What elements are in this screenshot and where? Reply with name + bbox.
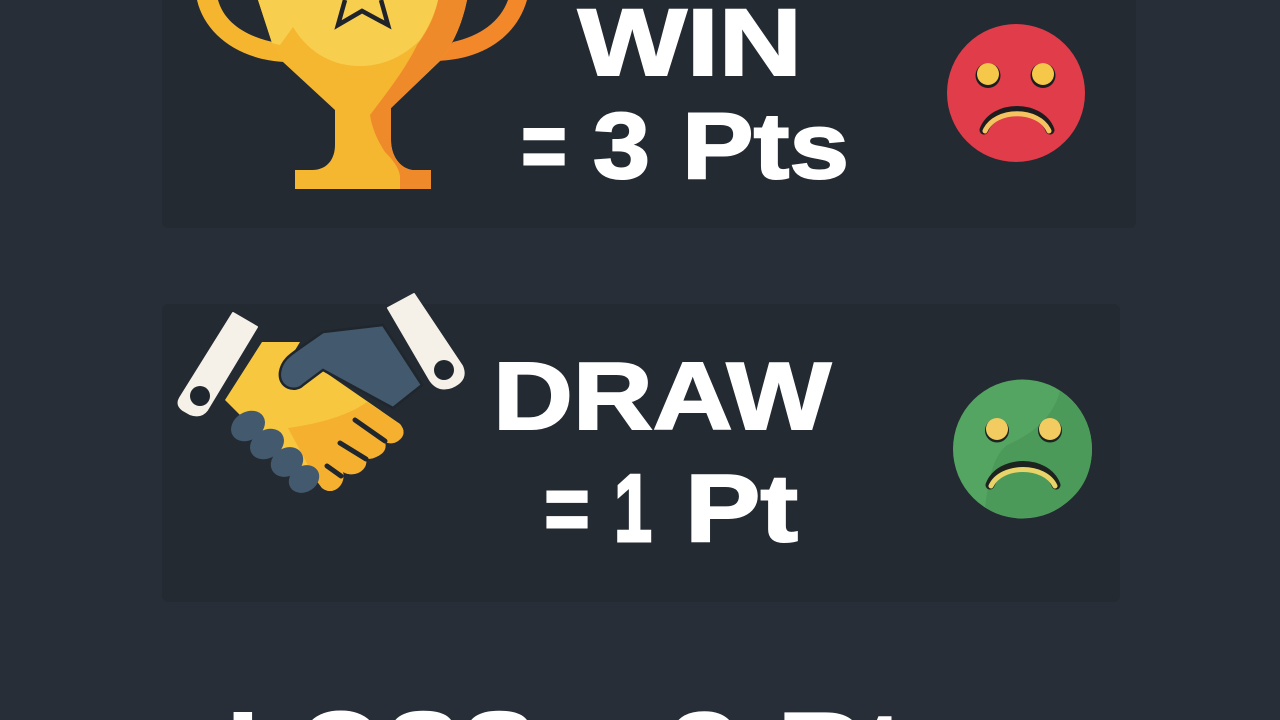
text: win points: Pts — [682, 93, 849, 198]
text: draw points: Pt — [685, 455, 798, 562]
text: win points: 3 — [593, 93, 650, 198]
icon: right cuff — [388, 294, 464, 388]
text: draw points: = — [544, 455, 590, 562]
text: draw points: 1 — [614, 455, 652, 562]
icon: green sad face — [953, 380, 1092, 518]
panel: win — [162, 0, 1136, 228]
heading: draw: DRAW — [493, 343, 831, 450]
icon: dark fingers — [225, 405, 324, 499]
icon: left cuff — [179, 313, 257, 415]
icon: trophy — [197, 0, 527, 189]
panel: draw — [162, 304, 1120, 602]
text: win points: = — [521, 93, 567, 198]
icon: handshake — [179, 294, 464, 499]
icon: dark hand — [280, 325, 422, 408]
icon: red sad face — [947, 24, 1085, 162]
icon: yellow hand — [225, 342, 404, 491]
